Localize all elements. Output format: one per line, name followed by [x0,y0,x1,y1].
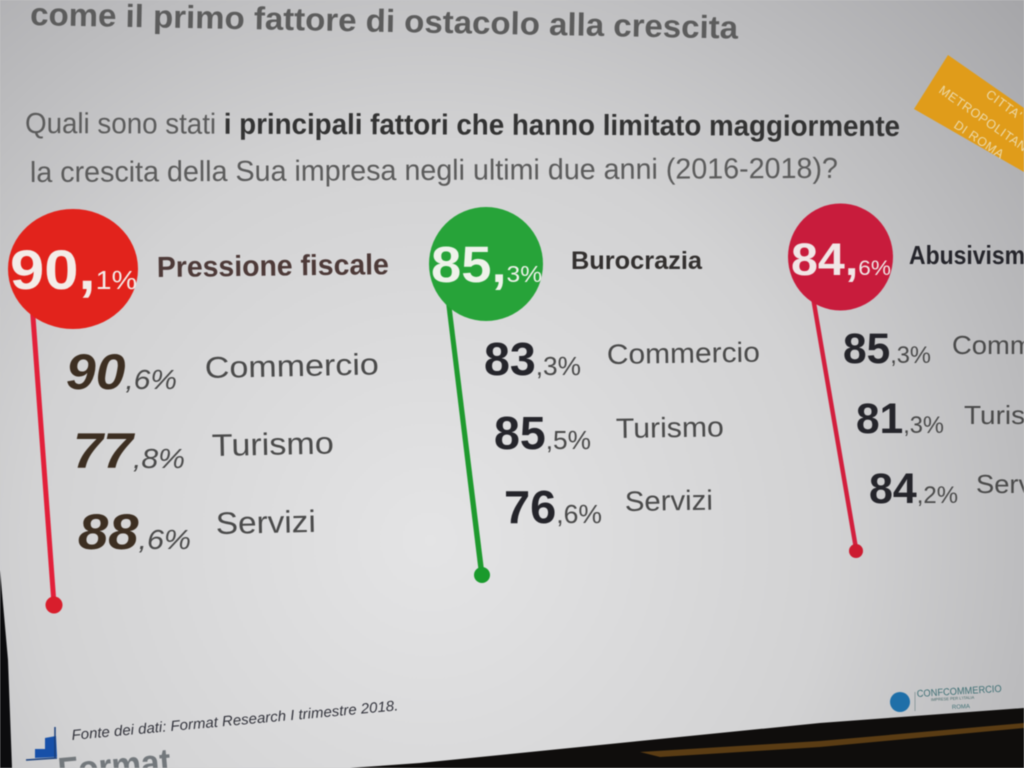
row Commercio: 85,3% [843,325,931,373]
question line 2: la crescita della Sua impresa negli ultimi due anni (2016-2018)? [30,153,838,189]
row Servizi: 76,6% [504,481,602,533]
row Commercio: 90,6% [66,344,177,400]
end dot [849,544,863,558]
screen bezel: left [0,570,12,768]
logo place: ROMA [952,704,970,711]
badge: Città Metropolitana di Roma [914,55,1024,172]
row Turismo: 77,8% [73,423,185,479]
source note: Fonte dei dati: Format Research I trimestre 2018. [71,698,399,744]
circle 90,1% [8,209,138,329]
heading Pressione fiscale: Pressione fiscale [157,249,389,284]
row Servizi: Servizi [215,504,316,541]
badge text: DI ROMA [951,118,1007,162]
row Turismo [73,423,334,479]
row Commercio [66,344,379,400]
panel: Pressione fiscale [8,209,389,614]
row Servizi: 88,6% [78,504,191,560]
logo: Format [26,727,172,768]
row Commercio: Commercio [204,348,379,385]
row Servizi: Servizi [625,485,713,517]
row Servizi: 84,2% [869,465,958,513]
row Turismo: 85,5% [494,407,591,459]
logo icon: stairs [26,727,57,760]
logo emblem [890,692,910,712]
row Commercio [484,333,760,385]
row Commercio: 83,3% [484,333,581,385]
row Turismo [494,407,724,459]
heading Burocrazia: Burocrazia [571,247,703,275]
stem [444,290,484,574]
row Turismo: 81,3% [856,395,944,443]
question line 1: Quali sono stati i principali fattori che hanno limitato maggiormente [25,108,900,143]
row Turismo [856,395,1024,443]
stem [810,290,858,550]
end dot [46,596,62,614]
logo wordmark: CONFCOMMERCIO [917,684,1002,700]
circle 84,6% [788,204,893,310]
bezel reflection [640,723,1024,757]
end dot [474,567,490,583]
logo subtitle: IMPRESE PER L'ITALIA [931,695,975,702]
screen bezel: bottom [350,708,1024,768]
panel: Abusivismo [788,204,1024,558]
row Commercio [843,325,1024,373]
logo: Confcommercio Roma [890,684,1002,712]
value 85,3%: 85,3% [431,236,542,293]
value 84,6%: 84,6% [791,234,891,285]
row Servizi [504,481,713,533]
value 90,1%: 90, 1% [10,238,137,301]
panel: Burocrazia [429,207,760,583]
row Commercio: Commercio [607,337,760,370]
badge text: CITTA' [983,87,1024,123]
stem [30,310,56,604]
circle 85,3% [429,207,543,321]
row Servizi [869,465,1024,513]
row Turismo: Turismo [211,425,334,463]
row Servizi [78,504,316,560]
row Turismo: Turismo [616,411,724,444]
